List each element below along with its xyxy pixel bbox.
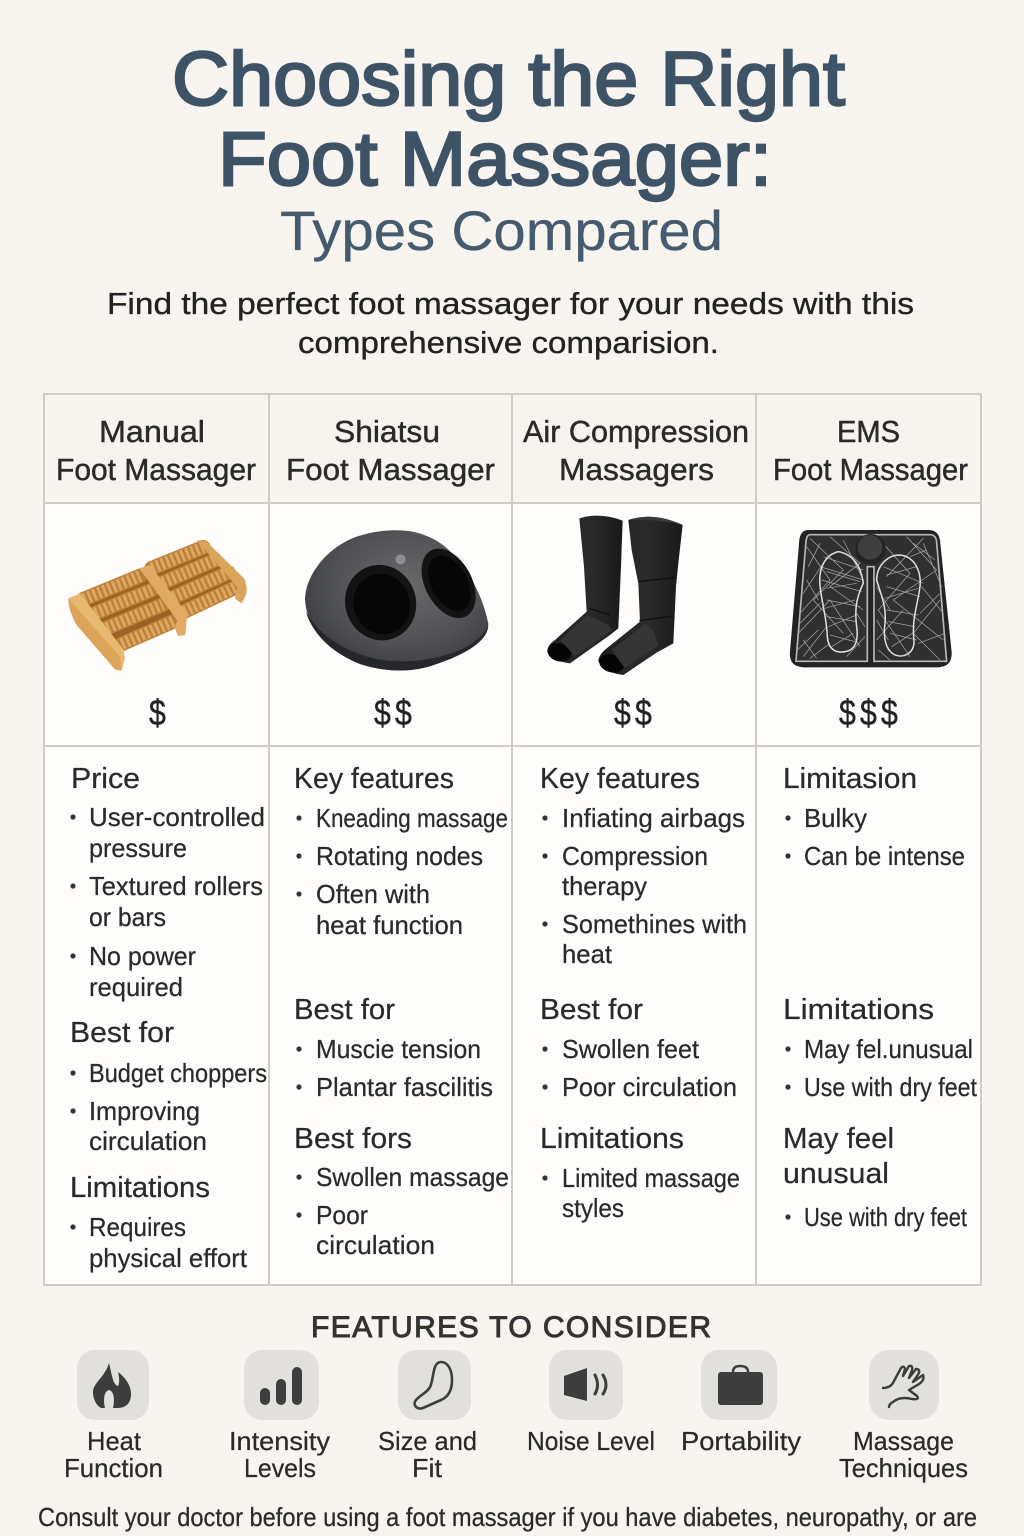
column: manual details: Limitations	[70, 1172, 210, 1204]
header: EMS foot massager	[773, 414, 968, 487]
column: manual details: Best for	[70, 1017, 174, 1049]
column: manual details: pressure	[89, 833, 187, 863]
column: shiatsu details: Often with	[316, 879, 430, 909]
column: air compression details: therapy	[562, 871, 647, 901]
feature: intensity levels	[229, 1350, 330, 1483]
column: manual details: circulation	[89, 1126, 207, 1156]
feature: heat function	[64, 1350, 163, 1483]
column: EMS details: Bulky	[804, 803, 867, 833]
image: shiatsu foot massager	[305, 530, 488, 670]
feature: heat function: Function	[64, 1453, 163, 1483]
header: manual foot massager: Manual	[99, 414, 205, 449]
column: manual details	[70, 763, 267, 1273]
feature: size and fit: Fit	[412, 1453, 443, 1483]
feature: massage techniques: Massage	[853, 1426, 954, 1456]
feature: heat function: Heat	[87, 1426, 142, 1456]
column: manual details: physical effort	[89, 1243, 248, 1273]
column: air compression details	[540, 763, 747, 1223]
header: shiatsu foot massager: Foot Massager	[286, 452, 495, 487]
column: EMS details	[783, 763, 978, 1232]
image: EMS foot mat	[790, 530, 952, 667]
column: manual details: Textured rollers	[89, 871, 263, 901]
column: EMS details: May fel.unusual	[804, 1034, 973, 1064]
column: manual details: User-controlled	[89, 802, 265, 832]
price: two dollars air compression: $$	[614, 694, 652, 734]
column: manual details: Budget choppers	[89, 1058, 267, 1088]
image: air compression boots	[545, 516, 683, 675]
column: shiatsu details: Best fors	[294, 1123, 412, 1155]
column: EMS details: Limitasion	[783, 763, 917, 795]
feature: noise level: Noise Level	[527, 1426, 655, 1456]
image: wooden foot roller	[68, 540, 247, 671]
column: EMS details: May feel	[783, 1123, 894, 1155]
price: one dollar: $	[149, 694, 166, 734]
title: Types Compared	[280, 199, 723, 262]
feature: massage techniques: Techniques	[839, 1453, 968, 1483]
column: shiatsu details	[294, 763, 509, 1260]
price: two dollars shiatsu: $$	[374, 694, 412, 734]
column: manual details: No power	[89, 941, 196, 971]
column: shiatsu details: Best for	[294, 994, 395, 1026]
column: manual details: required	[89, 972, 183, 1002]
column: shiatsu details: Key features	[294, 763, 454, 795]
column: EMS details: Limitations	[783, 994, 934, 1026]
header: air compression massagers	[523, 414, 749, 487]
header: manual foot massager: Foot Massager	[56, 452, 256, 487]
column: air compression details: Infiating airbags	[562, 803, 745, 833]
column: air compression details: styles	[562, 1193, 624, 1223]
subtitle	[107, 286, 914, 360]
column: shiatsu details: circulation	[316, 1230, 435, 1260]
column: EMS details: unusual	[783, 1158, 889, 1190]
subtitle: Find the perfect foot massager for your needs with this	[107, 286, 914, 321]
header: shiatsu foot massager: Shiatsu	[334, 414, 440, 449]
feature: portability: Portability	[681, 1426, 801, 1456]
column: shiatsu details: Kneading massage	[316, 803, 508, 833]
heading: features to consider: FEATURES TO CONSIDER	[311, 1311, 711, 1344]
column: air compression details: Limited massage	[562, 1163, 740, 1193]
title: Choosing the Right	[172, 37, 845, 122]
column: EMS details: Use with dry feet	[804, 1202, 968, 1232]
header: air compression massagers: Air Compression	[523, 414, 749, 449]
column: shiatsu details: Rotating nodes	[316, 841, 483, 871]
column: EMS details: Use with dry feet	[804, 1072, 978, 1102]
subtitle: comprehensive comparision.	[298, 325, 719, 360]
header: EMS foot massager: EMS	[837, 414, 900, 449]
column: air compression details: Limitations	[540, 1123, 684, 1155]
feature: size and fit: Size and	[378, 1426, 477, 1456]
column: shiatsu details: heat function	[316, 910, 463, 940]
column: air compression details: Poor circulation	[562, 1072, 737, 1102]
column: air compression details: Key features	[540, 763, 700, 795]
header: shiatsu foot massager	[286, 414, 495, 487]
header: air compression massagers: Massagers	[559, 452, 714, 487]
column: manual details: Requires	[89, 1212, 186, 1242]
column: shiatsu details: Plantar fascilitis	[316, 1072, 493, 1102]
feature: portability	[681, 1350, 801, 1456]
column: shiatsu details: Poor	[316, 1200, 368, 1230]
header: EMS foot massager: Foot Massager	[773, 452, 968, 487]
title	[172, 37, 845, 262]
column: EMS details: Can be intense	[804, 841, 965, 871]
feature: size and fit	[378, 1350, 477, 1483]
feature: noise level	[527, 1350, 655, 1456]
column: shiatsu details: Muscie tension	[316, 1034, 481, 1064]
feature: intensity levels: Levels	[244, 1453, 316, 1483]
title: Foot Massager:	[218, 117, 772, 202]
column: manual details: Improving	[89, 1096, 200, 1126]
column: air compression details: Somethines with	[562, 909, 747, 939]
feature: massage techniques	[839, 1350, 968, 1483]
feature: intensity levels: Intensity	[229, 1426, 330, 1456]
column: air compression details: heat	[562, 939, 613, 969]
column: air compression details: Swollen feet	[562, 1034, 700, 1064]
header: manual foot massager	[56, 414, 256, 487]
column: manual details: Price	[71, 763, 140, 795]
price: three dollars: $$$	[839, 694, 898, 734]
column: air compression details: Best for	[540, 994, 643, 1026]
panel: comparison table	[44, 394, 981, 1285]
column: manual details: or bars	[89, 902, 166, 932]
column: shiatsu details: Swollen massage	[316, 1162, 509, 1192]
column: air compression details: Compression	[562, 841, 708, 871]
